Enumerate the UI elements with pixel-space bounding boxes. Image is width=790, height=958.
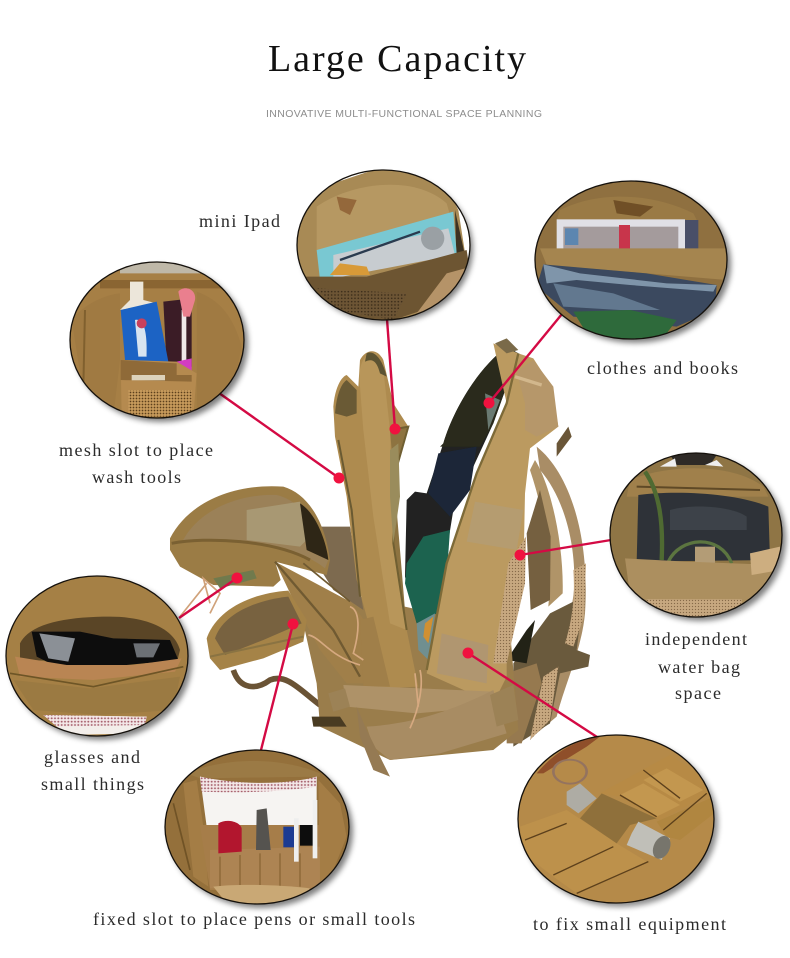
label: glasses and small things: small things [41,774,144,794]
front zipper panel [333,351,418,688]
detail circle: wash tools [67,258,250,422]
detail circle: glasses [3,573,193,740]
callout dots [232,398,526,658]
label: mesh slot to place wash tools: wash tools [92,467,181,487]
label: mini Ipad: mini Ipad [199,211,280,231]
line: clothes and books [489,314,562,403]
detail circle: pens and small tools [162,747,353,908]
line: water bag [520,540,611,555]
upper pocket flap [170,486,330,617]
title: Large Capacity [268,38,526,80]
bag contents [405,347,518,660]
label: fixed slot: fixed slot to place pens or small tools [93,909,415,929]
subtitle: INNOVATIVE MULTI-FUNCTIONAL SPACE PLANNING [266,108,542,120]
detail circle: mini Ipad [293,167,473,323]
lower pocket flap [207,591,307,670]
hose and base [233,597,518,760]
label: independent water bag space: space [675,683,721,703]
label: glasses and small things: glasses and [44,747,140,767]
line: mini Ipad [387,319,395,429]
line: small equipment [468,653,597,737]
label: clothes and books: clothes and books [587,358,738,378]
line: glasses [179,578,237,618]
rear compartment panel [427,338,572,703]
label: mesh slot to place wash tools [59,440,213,487]
waist belt [328,685,518,777]
zipper cords [308,607,421,728]
label: independent water bag space [645,629,747,703]
shoulder straps [507,447,590,747]
label: independent water bag space: independent [645,629,747,649]
backpack illustration [170,338,590,777]
detail circle: water bag [607,450,787,621]
line: pens [261,624,293,750]
line: wash tools [219,393,339,478]
callout lines [179,314,611,750]
textured lump behind flap [317,527,363,610]
label: independent water bag space: water bag [658,657,740,677]
detail circle: clothes and books [530,177,733,343]
label: glasses and small things [41,747,144,794]
label: mesh slot to place wash tools: mesh slot to place [59,440,213,460]
seam panel [275,562,373,683]
detail circle: small equipment [515,732,718,907]
label: to fix small equipment: to fix small equipment [533,914,726,934]
